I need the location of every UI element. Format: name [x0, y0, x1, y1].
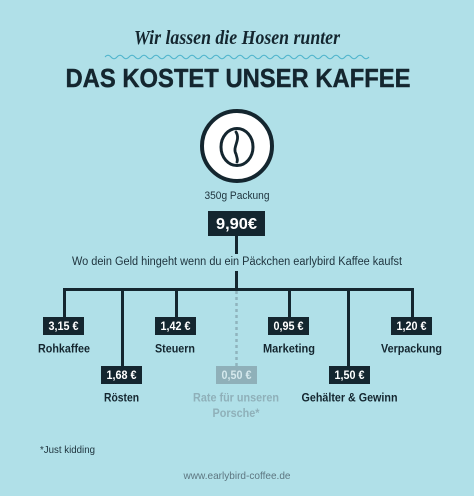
- connector: price to caption: [235, 236, 238, 254]
- website url: www.earlybird-coffee.de: [183, 470, 291, 482]
- item: Rösten: Rösten: [104, 390, 139, 404]
- item: Marketing: Marketing: [263, 342, 315, 356]
- item: Steuern: 1,42 €: [160, 319, 191, 333]
- subtitle: Wir lassen die Hosen runter: [134, 27, 340, 49]
- item: Steuern: Steuern: [155, 342, 195, 356]
- item: Rate für unseren Porsche: Rate für unseren: [193, 390, 279, 404]
- item: Rohkaffee: 3,15 €: [48, 319, 79, 333]
- item: Verpackung: [381, 317, 442, 356]
- item: Rate für unseren Porsche: Porsche*: [212, 406, 260, 420]
- item: Marketing: [263, 317, 315, 356]
- item: Rate für unseren Porsche: [193, 366, 279, 420]
- item: Rohkaffee: [38, 317, 90, 356]
- item: Gehälter & Gewinn: 1,50 €: [334, 368, 365, 382]
- item: Verpackung: Verpackung: [381, 342, 442, 356]
- caption: Wo dein Geld hingeht wenn du ein Päckchen earlybird Kaffee kaufst: [72, 256, 403, 268]
- item: Marketing: 0,95 €: [274, 319, 304, 333]
- item: Rösten: 1,68 €: [106, 368, 137, 382]
- dashed connector: [235, 291, 238, 366]
- title: DAS KOSTET UNSER KAFFEE: [66, 63, 410, 93]
- item: Rate für unseren Porsche: 0,50 €: [222, 368, 252, 382]
- item: Gehälter & Gewinn: Gehälter & Gewinn: [302, 390, 398, 404]
- icon: coffee bean: [202, 111, 272, 181]
- item: Rohkaffee: Rohkaffee: [38, 342, 90, 356]
- tree connectors: [63, 271, 414, 367]
- item: Verpackung: 1,20 €: [396, 319, 427, 333]
- total price: 9,90€: [216, 216, 257, 233]
- item: Gehälter & Gewinn: [302, 366, 398, 404]
- wave divider: [105, 55, 369, 59]
- footnote: *Just kidding: [40, 444, 95, 456]
- package size label: 350g Packung: [204, 190, 270, 202]
- item: Rösten: [101, 366, 142, 404]
- item: Steuern: [155, 317, 196, 356]
- total price: [208, 211, 265, 236]
